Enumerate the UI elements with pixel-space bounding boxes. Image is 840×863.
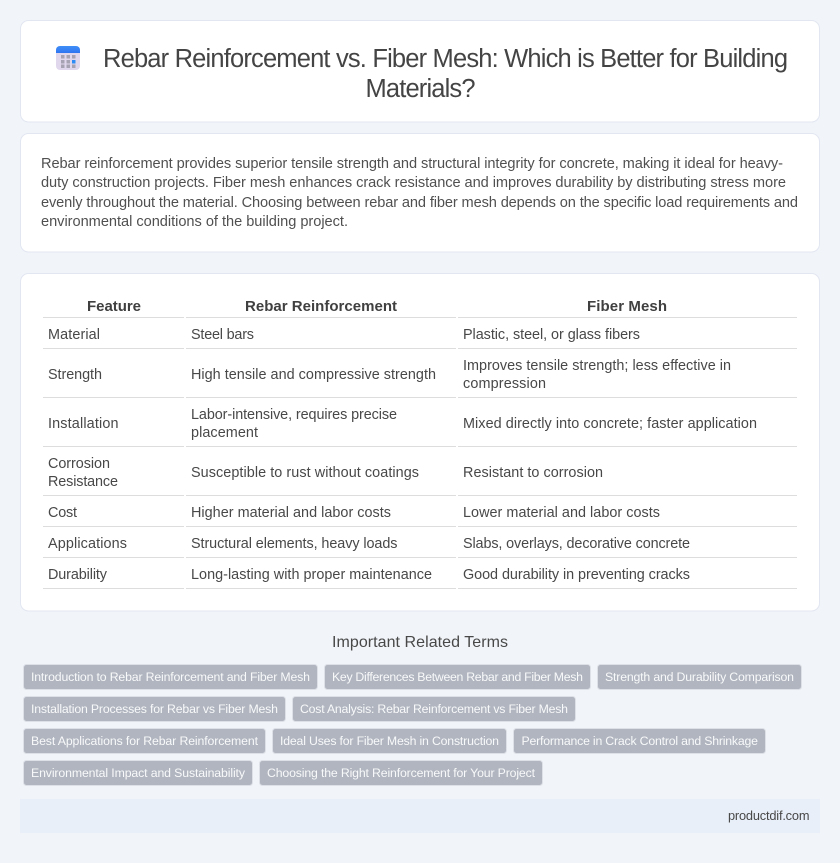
tag (260, 760, 542, 786)
table header: Rebar Reinforcement (245, 298, 397, 315)
footer (20, 799, 820, 833)
row: durability (43, 567, 797, 588)
row: installation: Mixed directly into concrete; faster application (463, 416, 757, 432)
tag: Key Differences Between Rebar and Fiber Mesh (332, 670, 583, 684)
heading: related terms: Important Related Terms (332, 634, 508, 651)
tag list: related terms (24, 664, 802, 786)
tag (514, 728, 766, 754)
tag: Cost Analysis: Rebar Reinforcement vs Fiber Mesh (300, 702, 568, 716)
tag (598, 664, 802, 690)
row: installation: placement (191, 425, 258, 441)
row: corrosion resistance: Resistant to corrosion (463, 465, 603, 481)
row: installation: Labor-intensive, requires precise (191, 407, 397, 423)
title (103, 45, 788, 103)
row: durability: Durability (48, 567, 108, 583)
title: Rebar Reinforcement vs. Fiber Mesh: Which is Better for Building (103, 45, 788, 73)
tag: Introduction to Rebar Reinforcement and Fiber Mesh (31, 670, 310, 684)
row: applications (43, 536, 797, 558)
row: corrosion resistance: Resistance (48, 474, 118, 490)
row: corrosion resistance: Corrosion (48, 456, 110, 472)
tag (24, 696, 286, 722)
tag (272, 728, 506, 754)
table header (43, 298, 797, 318)
panel: title card (20, 20, 820, 122)
row: cost (43, 505, 797, 526)
tag: Choosing the Right Reinforcement for Your Project (267, 766, 536, 780)
row: strength (43, 358, 797, 398)
tag: Strength and Durability Comparison (605, 670, 794, 684)
row: installation: Installation (48, 416, 118, 432)
row: applications: Structural elements, heavy loads (191, 536, 398, 552)
text block: summary: Rebar reinforcement provides superior tensile strength and structural integrity for concrete, making it ideal for heavy- (41, 156, 783, 172)
row: durability: Long-lasting with proper maintenance (191, 567, 432, 583)
tag: Best Applications for Rebar Reinforcement (31, 734, 259, 748)
footer: productdif.com (728, 808, 810, 823)
table header: Feature (87, 298, 141, 315)
tag: Environmental Impact and Sustainability (31, 766, 246, 780)
text block: summary: duty construction projects. Fiber mesh enhances crack resistance and improves durability by distributing stress more (41, 175, 786, 191)
row: cost: Lower material and labor costs (463, 505, 660, 521)
tag (24, 728, 266, 754)
row: applications: Applications (48, 536, 127, 552)
tag (324, 664, 590, 690)
text block: summary (41, 156, 798, 230)
panel: comparison table (20, 274, 820, 611)
tag (292, 696, 576, 722)
tag: Installation Processes for Rebar vs Fiber Mesh (31, 702, 278, 716)
tag: Ideal Uses for Fiber Mesh in Construction (280, 734, 499, 748)
text block: summary: evenly throughout the material. Choosing between rebar and fiber mesh depends on the specific load requirements and (41, 195, 798, 211)
text block: summary: environmental conditions of the building project. (41, 214, 348, 230)
row: strength: compression (463, 376, 546, 392)
table header: Fiber Mesh (587, 298, 667, 315)
tag (24, 664, 318, 690)
row: material (43, 327, 797, 348)
row: strength: Improves tensile strength; less effective in (463, 358, 731, 374)
title: Materials? (366, 75, 476, 103)
row: durability: Good durability in preventing cracks (463, 567, 690, 583)
tag: Performance in Crack Control and Shrinkage (522, 734, 758, 748)
row: cost: Higher material and labor costs (191, 505, 391, 521)
row: corrosion resistance: Susceptible to rust without coatings (191, 465, 419, 481)
row: material: Material (48, 327, 100, 343)
row: corrosion resistance (43, 456, 797, 496)
row: material: Plastic, steel, or glass fibers (463, 327, 640, 343)
row: installation (43, 407, 797, 446)
row: cost: Cost (48, 505, 77, 521)
row: strength: High tensile and compressive strength (191, 367, 436, 383)
panel: intro paragraph (20, 134, 820, 252)
icon: calendar (56, 46, 80, 70)
row: material: Steel bars (191, 327, 254, 343)
row: applications: Slabs, overlays, decorative concrete (463, 536, 690, 552)
row: strength: Strength (48, 367, 102, 383)
tag (24, 760, 252, 786)
